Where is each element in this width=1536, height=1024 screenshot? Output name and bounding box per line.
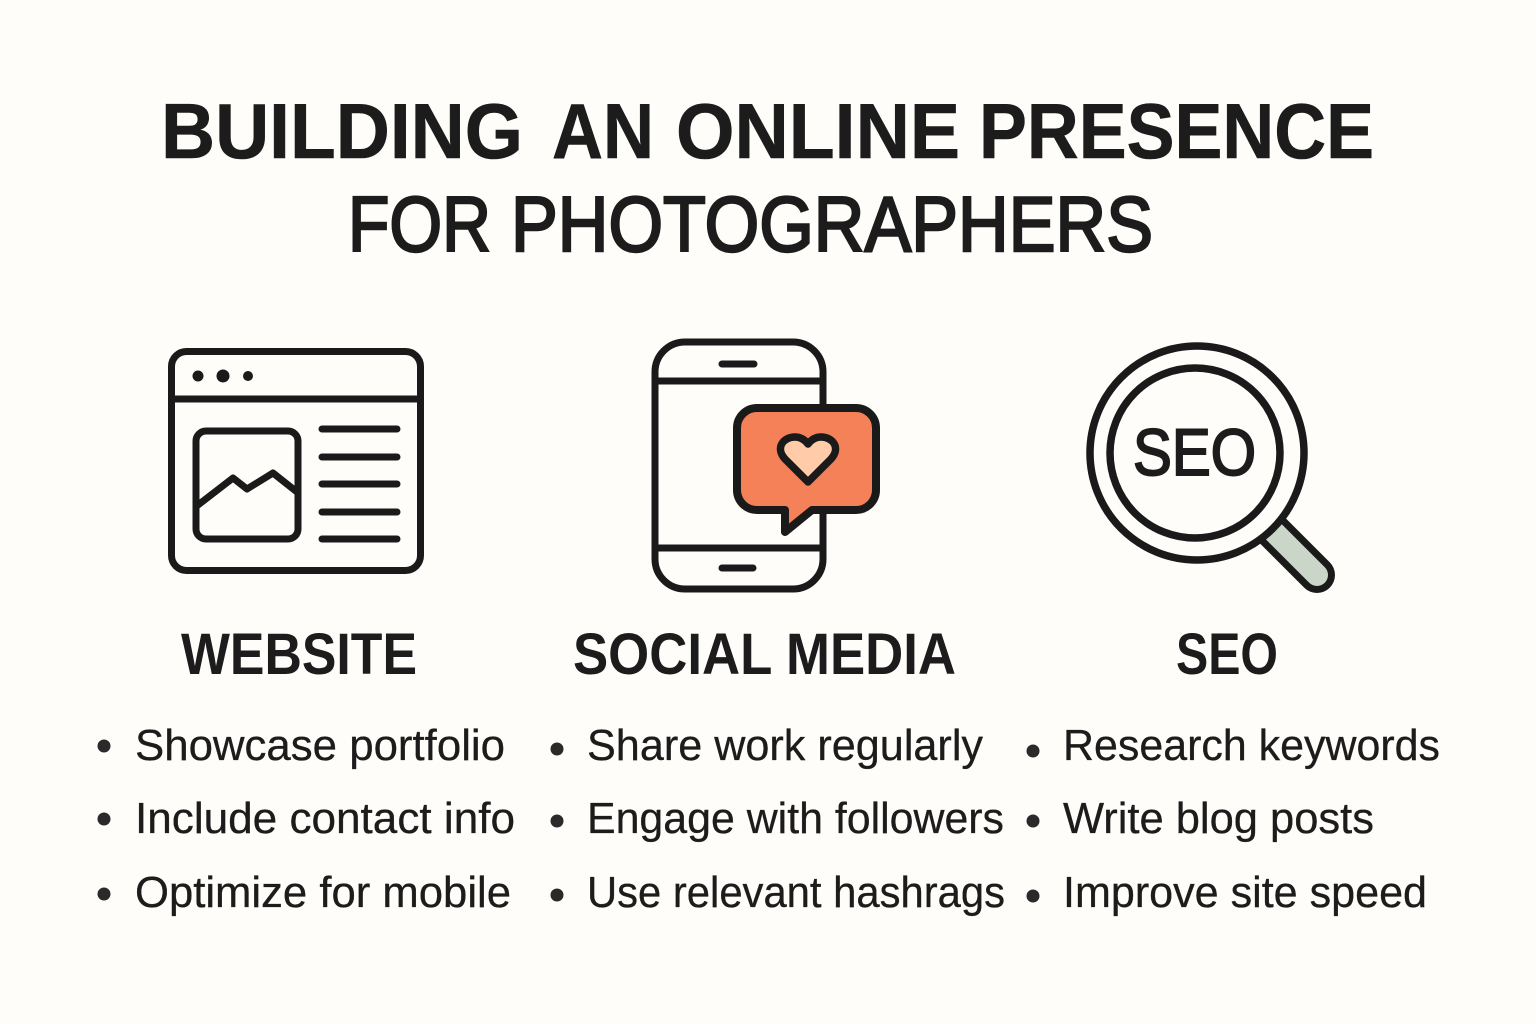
title: AN bbox=[552, 87, 654, 175]
icon: magnifying glass bbox=[1090, 346, 1317, 575]
list: social media: Share work regularly bbox=[587, 721, 983, 770]
list: seo: Research keywords bbox=[1063, 721, 1440, 770]
heading: social media: SOCIAL MEDIA bbox=[573, 622, 956, 687]
list: website bbox=[98, 721, 515, 917]
list: website: Optimize for mobile bbox=[135, 868, 511, 917]
panel: seo bbox=[1026, 346, 1440, 917]
list: social media bbox=[550, 721, 1005, 917]
title: FOR bbox=[348, 180, 491, 268]
icon: phone with speech bubble bbox=[655, 342, 876, 589]
heading: website: WEBSITE bbox=[181, 622, 417, 687]
title bbox=[161, 87, 1374, 268]
list: seo bbox=[1026, 721, 1440, 917]
title: PRESENCE bbox=[979, 87, 1374, 175]
icon: magnifying glass: SEO bbox=[1133, 415, 1256, 489]
panel: website bbox=[98, 352, 515, 917]
list: social media: Use relevant hashrags bbox=[587, 868, 1005, 917]
list: seo: Write blog posts bbox=[1063, 794, 1374, 843]
icon: browser window bbox=[172, 352, 420, 570]
list: website: Showcase portfolio bbox=[135, 721, 505, 770]
panel: social media bbox=[550, 342, 1005, 917]
list: seo: Improve site speed bbox=[1063, 868, 1427, 917]
list: website: Include contact info bbox=[135, 794, 515, 843]
title: PHOTOGRAPHERS bbox=[511, 180, 1153, 268]
list: social media: Engage with followers bbox=[587, 794, 1004, 843]
title: BUILDING bbox=[161, 87, 523, 175]
heading: seo: SEO bbox=[1176, 622, 1278, 687]
title: ONLINE bbox=[676, 87, 960, 175]
